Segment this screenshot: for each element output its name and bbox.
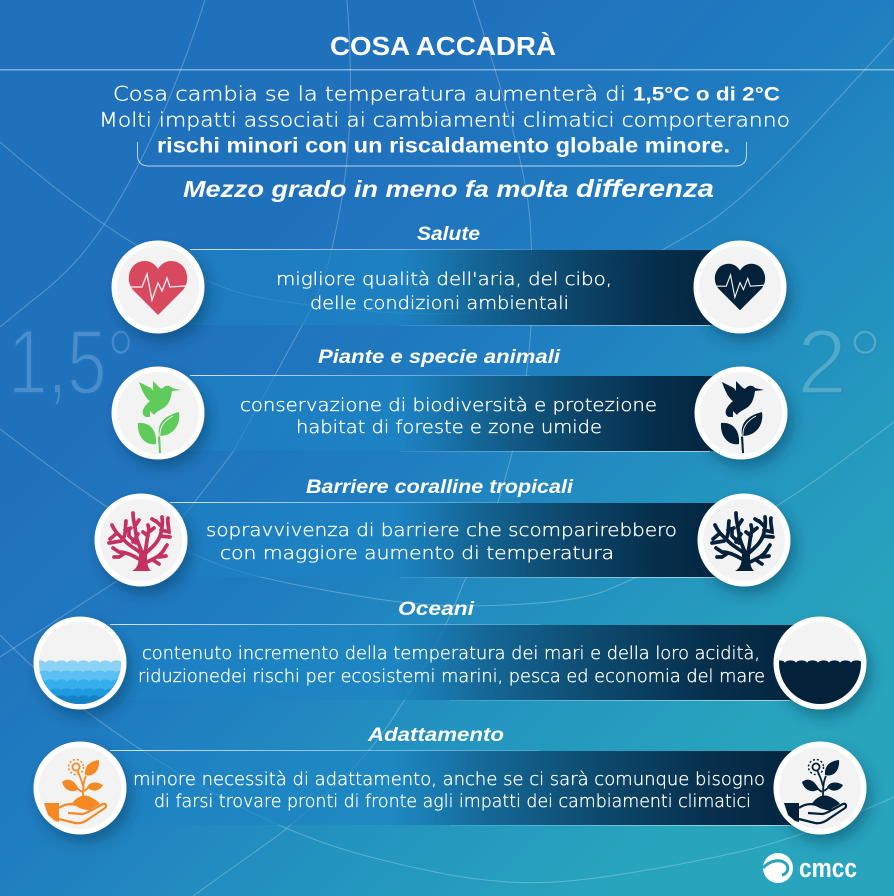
- bracket under intro: [138, 142, 746, 166]
- text: [133, 769, 765, 812]
- intro line 1: Cosa cambia se la temperatura aumenterà di 1,5°C o di 2°C: [113, 82, 780, 106]
- intro text block: [99, 82, 790, 158]
- title: COSA ACCADRÀ: [330, 31, 556, 61]
- panel: Oceani: [32, 601, 878, 724]
- intro line 3: rischi minori con un riscaldamento globale minore.: [157, 134, 730, 158]
- icon: dark heart: [694, 240, 786, 334]
- heading: Oceani: Oceani: [398, 599, 475, 620]
- icon: dark bird and plant: [694, 366, 788, 460]
- logo mark: [763, 853, 793, 883]
- text: minore necessità di adattamento, anche se ci sarà comunque bisogno: [133, 769, 765, 790]
- panel: Barriere coralline tropicali: [94, 477, 790, 586]
- text: riduzionedei rischi per ecosistemi marini, pesca ed economia del mare: [138, 666, 765, 687]
- text: con maggiore aumento di temperatura: [220, 543, 614, 564]
- panel: Adattamento: [34, 725, 866, 834]
- heading: Salute: Salute: [417, 224, 480, 245]
- panel: Piante e specie animali: [112, 347, 788, 460]
- band: [158, 376, 740, 451]
- icon: orange hand and plant: [34, 742, 126, 834]
- text: [138, 643, 765, 687]
- text: sopravvivenza di barriere che scomparirebbero: [206, 520, 677, 541]
- panel: Salute: [112, 224, 786, 334]
- heading: Piante: Piante e specie animali: [318, 347, 561, 368]
- band: [141, 503, 744, 577]
- band: [80, 751, 820, 825]
- text: [206, 520, 677, 564]
- big label 2°: 2°: [797, 312, 883, 414]
- text: delle condizioni ambientali: [310, 293, 569, 314]
- text: [240, 395, 657, 438]
- icon: dark hand and plant: [774, 742, 866, 834]
- icon: green bird and plant: [112, 366, 204, 460]
- heading: Adattamento: Adattamento: [367, 725, 504, 746]
- heading: Barriere: Barriere coralline tropicali: [306, 477, 574, 498]
- title rule: [0, 69, 894, 70]
- icon: red heart: [112, 240, 204, 334]
- icon: blue waves: [32, 616, 140, 724]
- logo: cmcc: [763, 853, 857, 883]
- band: [158, 250, 740, 325]
- icon: dark water: [774, 616, 866, 723]
- text: di farsi trovare pronti di fronte agli impatti dei cambiamenti climatici: [154, 791, 751, 812]
- icon: dark coral: [698, 494, 790, 586]
- intro line 2: Molti impatti associati ai cambiamenti climatici comporteranno: [99, 108, 790, 132]
- logo wordmark: cmcc: [799, 853, 857, 883]
- subtitle: Mezzo grado in meno fa molta differenza: [183, 175, 714, 203]
- text: habitat di foreste e zone umide: [296, 417, 602, 438]
- text: migliore qualità dell'aria, del cibo,: [276, 269, 612, 290]
- text: conservazione di biodiversità e protezione: [240, 395, 657, 416]
- text: contenuto incremento della temperatura dei mari e della loro acidità,: [142, 643, 760, 664]
- band: [80, 625, 820, 700]
- text: [276, 269, 612, 314]
- big label 1,5°: 1,5°: [8, 312, 135, 414]
- icon: pink coral: [94, 494, 188, 586]
